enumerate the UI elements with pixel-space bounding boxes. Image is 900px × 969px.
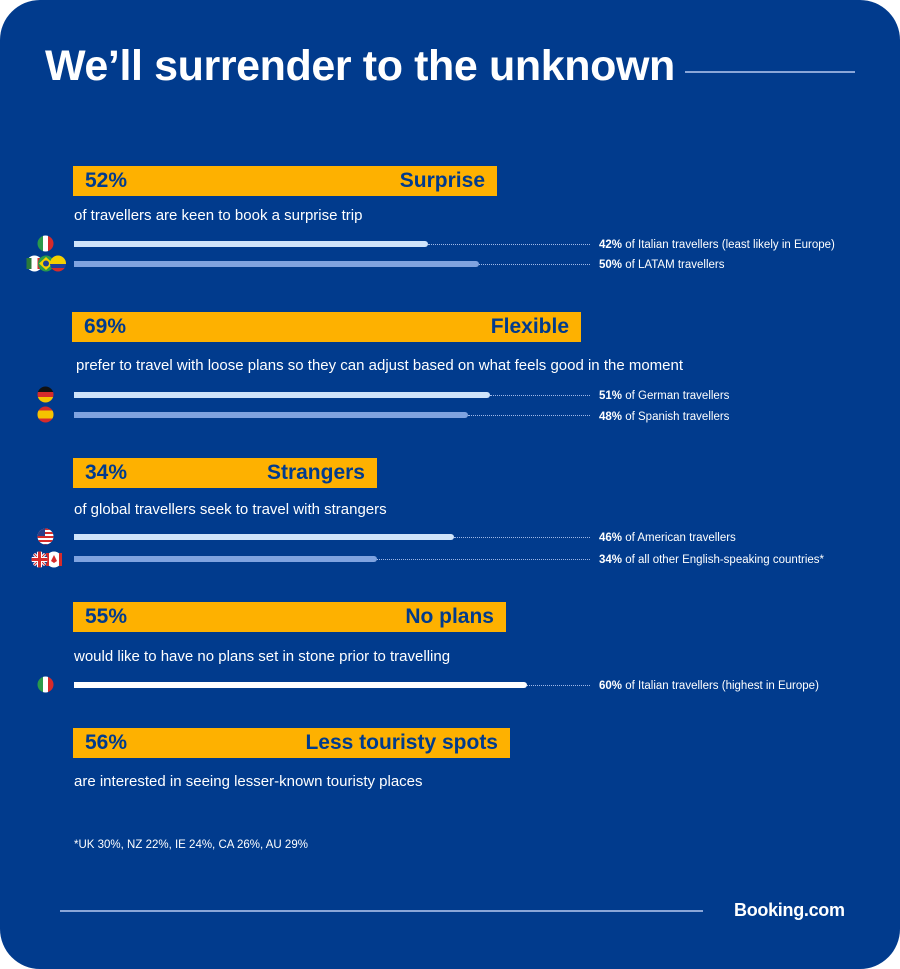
text: no plans: would like to have no plans set in stone prior to travelling [74, 648, 450, 665]
title: We’ll surrender to the unknown [45, 42, 675, 90]
banner: surprise: Surprise [400, 169, 485, 192]
icon: uk canada flags [32, 552, 62, 568]
banner: strangers [73, 458, 377, 488]
banner: strangers: 34% [85, 461, 127, 484]
text: less touristy: are interested in seeing lesser-known touristy places [74, 773, 423, 790]
banner: no plans: 55% [85, 605, 127, 628]
footnote: *UK 30%, NZ 22%, IE 24%, CA 26%, AU 29% [74, 839, 308, 851]
label: spain: 48% of Spanish travellers [599, 411, 729, 423]
icon: latam flags [26, 256, 66, 272]
text: strangers: of global travellers seek to travel with strangers [74, 501, 387, 518]
icon: italy flag [38, 236, 54, 252]
bar: spain [74, 412, 468, 418]
banner: less touristy: Less touristy spots [305, 731, 498, 754]
icon: usa flag [38, 528, 54, 544]
label: english: 34% of all other English-speaking countries* [599, 554, 824, 566]
label: italy 60: 60% of Italian travellers (highest in Europe) [599, 680, 819, 692]
logo: booking.com: Booking.com [734, 900, 845, 920]
banner: strangers: Strangers [267, 461, 365, 484]
banner: no plans [73, 602, 506, 632]
banner: surprise: 52% [85, 169, 127, 192]
bar: latam [74, 261, 479, 267]
banner: no plans: No plans [405, 605, 494, 628]
label: germany: 51% of German travellers [599, 390, 729, 402]
banner: flexible [72, 312, 581, 342]
text: flexible: prefer to travel with loose plans so they can adjust based on what feels good in the moment [76, 357, 683, 374]
banner: flexible: Flexible [491, 315, 569, 338]
icon: germany flag [38, 386, 54, 402]
banner: less touristy: 56% [85, 731, 127, 754]
bar: germany [74, 392, 490, 398]
bar: usa [74, 534, 454, 540]
label: italy 42: 42% of Italian travellers (least likely in Europe) [599, 239, 835, 251]
banner: surprise [73, 166, 497, 196]
label: usa: 46% of American travellers [599, 532, 736, 544]
bar: english [74, 556, 377, 562]
text: surprise: of travellers are keen to book a surprise trip [74, 207, 362, 224]
bar: italy 60 [74, 682, 527, 688]
bar: italy 42 [74, 241, 428, 247]
banner: less touristy [73, 728, 510, 758]
icon: spain flag [38, 406, 54, 422]
icon: italy flag 2 [38, 676, 54, 692]
banner: flexible: 69% [84, 315, 126, 338]
label: latam: 50% of LATAM travellers [599, 259, 724, 271]
